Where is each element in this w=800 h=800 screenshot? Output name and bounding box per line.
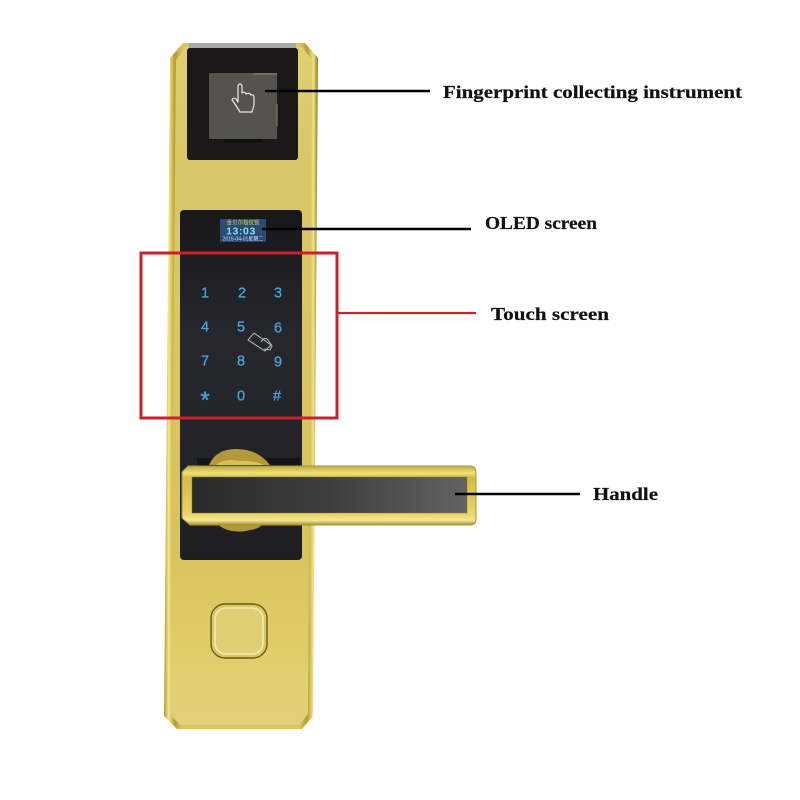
- keypad digits: [200, 286, 282, 414]
- label: touch screen: Touch screen: [491, 304, 609, 324]
- handle inset: [192, 477, 467, 513]
- keypad digits: 7: [201, 354, 209, 370]
- icon: pointing hand: [232, 84, 254, 112]
- leader line: fingerprint: [265, 90, 430, 92]
- handle: [182, 466, 476, 525]
- label: fingerprint: Fingerprint collecting instrument: [443, 82, 742, 102]
- label: OLED screen: OLED screen: [485, 213, 597, 233]
- leader line: touch screen: [337, 312, 476, 314]
- icon: fingerprint sensor: [209, 73, 277, 142]
- keypad digits: 2: [238, 286, 246, 302]
- keypad digits: 9: [274, 354, 282, 370]
- keypad digits: 4: [201, 320, 209, 336]
- keypad digits: 1: [201, 286, 209, 302]
- label: handle: Handle: [593, 484, 658, 504]
- keypad digits: 5: [237, 320, 245, 336]
- OLED display: 金贝尔指纹锁: [226, 218, 260, 226]
- keypad digits: 3: [274, 286, 282, 302]
- leader line: OLED: [262, 228, 471, 230]
- keypad digits: *: [200, 387, 210, 414]
- keypad digits: 8: [237, 354, 245, 370]
- lower button: [211, 604, 267, 658]
- keypad digits: #: [273, 388, 281, 404]
- keypad digits: 6: [274, 320, 282, 336]
- keypad panel: [180, 210, 302, 560]
- handle rose: [197, 449, 300, 532]
- keypad digits: 0: [237, 388, 245, 404]
- icon: card reader: [248, 333, 272, 351]
- OLED display: 13:03: [226, 226, 256, 238]
- OLED display: [220, 218, 266, 242]
- leader line: handle: [455, 493, 580, 495]
- top sensor window: [187, 43, 298, 160]
- callout box: touch screen: [141, 253, 337, 418]
- OLED display: 2015-04-01星期二: [223, 236, 263, 242]
- lock plate: [164, 43, 318, 729]
